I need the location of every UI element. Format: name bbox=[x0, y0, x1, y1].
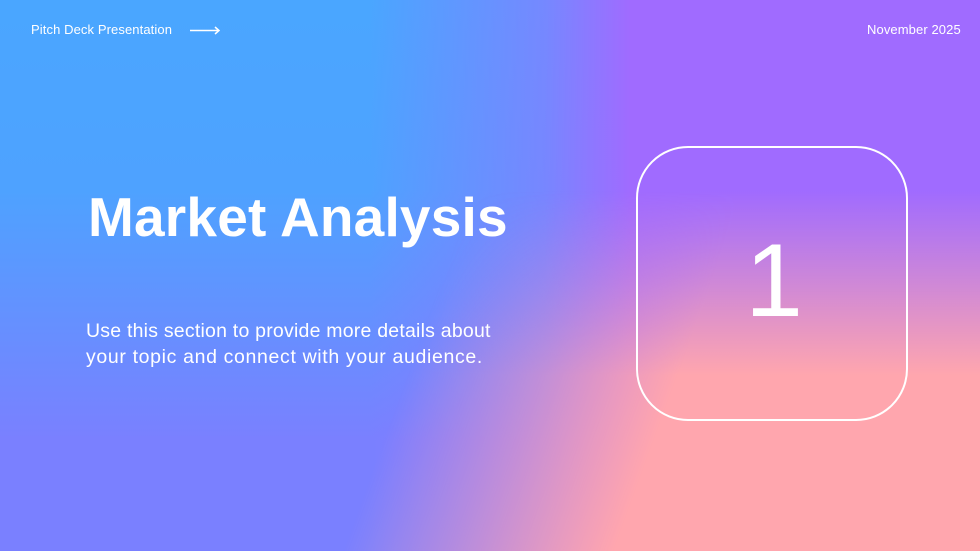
description bbox=[86, 320, 491, 368]
number: 1 bbox=[745, 223, 803, 339]
header label: Pitch Deck Presentation bbox=[31, 22, 172, 37]
description: your topic and connect with your audience. bbox=[86, 346, 483, 368]
title: Market Analysis bbox=[88, 186, 508, 248]
date: November 2025 bbox=[867, 22, 961, 37]
pink glow bbox=[362, 208, 980, 551]
description: Use this section to provide more details about bbox=[86, 320, 491, 342]
panel: section number bbox=[636, 146, 908, 421]
icon: arrow bbox=[190, 26, 220, 34]
